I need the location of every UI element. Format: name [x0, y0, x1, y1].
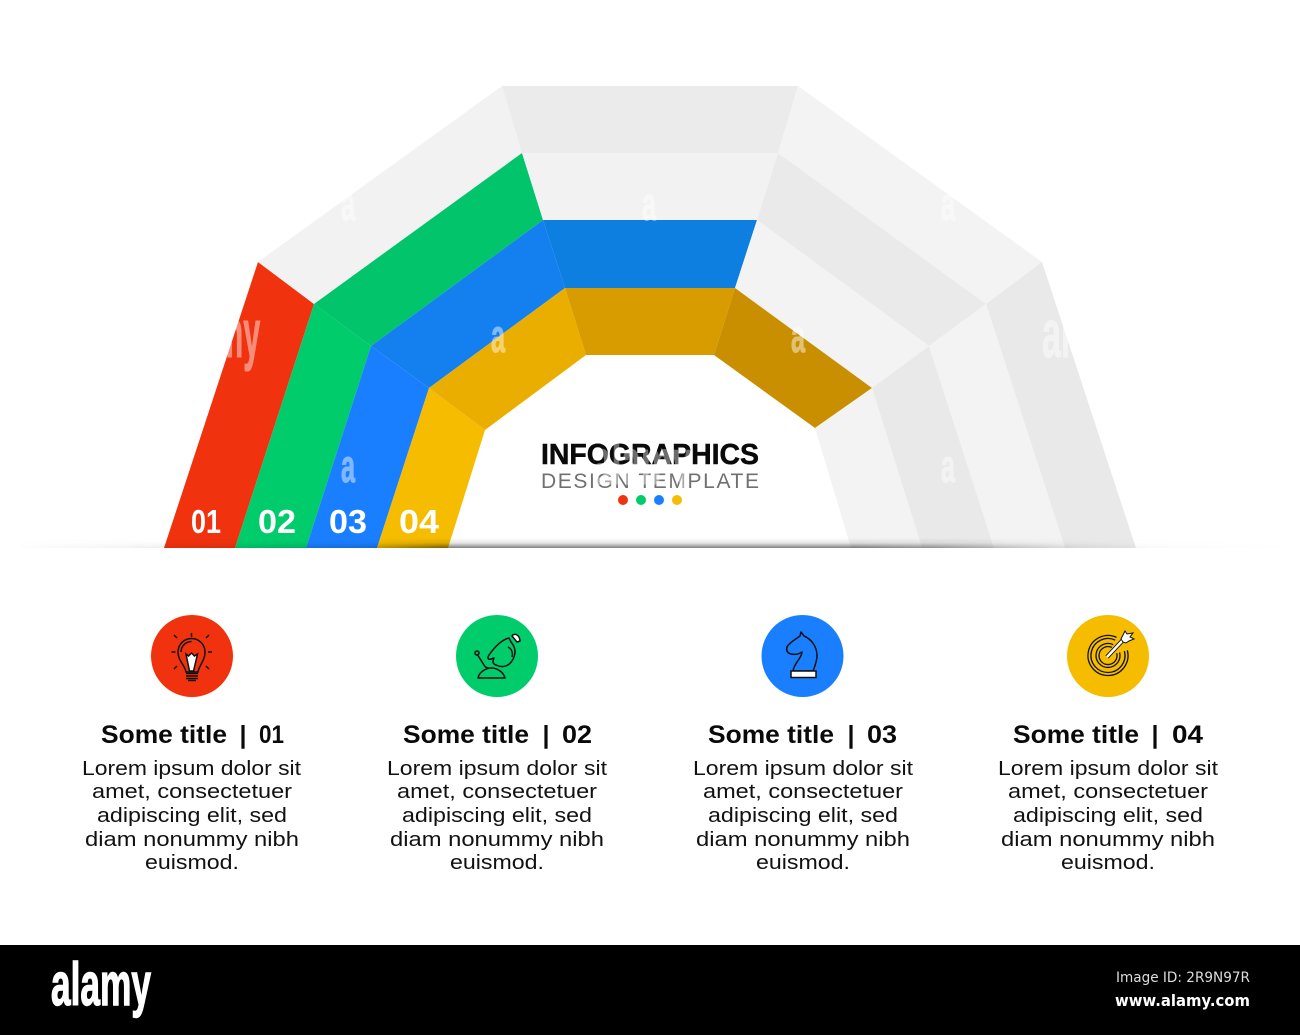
title: 02: [562, 721, 592, 749]
title: |: [1152, 721, 1158, 749]
body text: diam nonummy nibh: [696, 829, 910, 851]
watermark fragments: al: [1042, 296, 1070, 372]
watermark fragments: a: [642, 178, 656, 230]
title: |: [848, 721, 854, 749]
title: [708, 721, 897, 749]
ring 3: blue segment: [306, 220, 994, 548]
title: Some title: [1013, 721, 1139, 749]
body text: adipiscing elit, sed: [1013, 805, 1203, 827]
body text: euismod.: [450, 852, 544, 874]
title: Some title: [708, 721, 834, 749]
website: www.alamy.com: [1115, 991, 1250, 1010]
body text: diam nonummy nibh: [1001, 829, 1215, 851]
body text: Lorem ipsum dolor sit: [82, 758, 302, 780]
title: |: [542, 721, 550, 749]
ring 1: red segment: [164, 86, 1136, 548]
center title: [541, 426, 759, 505]
step numbers: 03: [329, 503, 367, 540]
watermark fragments: my: [216, 296, 261, 372]
title: 04: [1172, 721, 1203, 749]
arch chart: [164, 86, 1136, 548]
body text: diam nonummy nibh: [85, 829, 299, 851]
body text: amet, consectetuer: [703, 781, 903, 803]
step numbers: 02: [258, 503, 296, 540]
center watermark: alamy: [592, 426, 692, 498]
body text: euismod.: [1061, 852, 1155, 874]
watermark fragments: a: [791, 310, 805, 362]
body text: Lorem ipsum dolor sit: [387, 758, 608, 780]
step numbers: 04: [399, 503, 440, 540]
color dots: [618, 495, 682, 505]
watermark fragments: a: [341, 440, 355, 492]
icon: chess knight: [762, 615, 844, 697]
title: 03: [867, 721, 897, 749]
icon: target with dart: [1067, 615, 1149, 697]
body text: euismod.: [756, 852, 850, 874]
title: [101, 721, 284, 749]
title: [403, 721, 592, 749]
column 4: [998, 615, 1219, 874]
ring 2: green segment: [235, 153, 1065, 548]
step numbers: 01: [191, 503, 221, 540]
watermark fragments: a: [491, 310, 505, 362]
watermark fragments: a: [941, 440, 955, 492]
baseline shadow: [85, 540, 1136, 548]
body text: Lorem ipsum dolor sit: [693, 758, 914, 780]
body text: amet, consectetuer: [397, 781, 597, 803]
body text: adipiscing elit, sed: [97, 805, 287, 827]
title: 01: [259, 721, 284, 749]
watermark fragments: [216, 178, 1070, 492]
center title: INFOGRAPHICS: [541, 439, 759, 471]
column 3: [693, 615, 914, 874]
footer bar: [0, 945, 1300, 1035]
ring 4: yellow segment: [377, 288, 922, 548]
column 1: [82, 615, 302, 874]
body text: adipiscing elit, sed: [708, 805, 898, 827]
body text: [387, 758, 608, 874]
column 2: [387, 615, 608, 874]
body text: amet, consectetuer: [1008, 781, 1208, 803]
body text: [998, 758, 1219, 874]
body text: amet, consectetuer: [92, 781, 292, 803]
watermark fragments: a: [941, 178, 955, 230]
image id: Image ID: 2R9N97R: [1116, 970, 1250, 986]
body text: Lorem ipsum dolor sit: [998, 758, 1219, 780]
body text: [82, 758, 302, 874]
icon: light bulb: [151, 615, 233, 697]
step numbers: [191, 503, 440, 540]
title: [1013, 721, 1203, 749]
title: Some title: [403, 721, 529, 749]
footer logo: alamy: [51, 951, 151, 1018]
title: |: [240, 721, 246, 749]
body text: euismod.: [145, 852, 239, 874]
watermark fragments: a: [341, 178, 355, 230]
center title: DESIGN TEMPLATE: [541, 470, 759, 493]
icon: microscope: [456, 615, 538, 697]
body text: diam nonummy nibh: [390, 829, 604, 851]
title: Some title: [101, 721, 227, 749]
body text: [693, 758, 914, 874]
body text: adipiscing elit, sed: [402, 805, 592, 827]
